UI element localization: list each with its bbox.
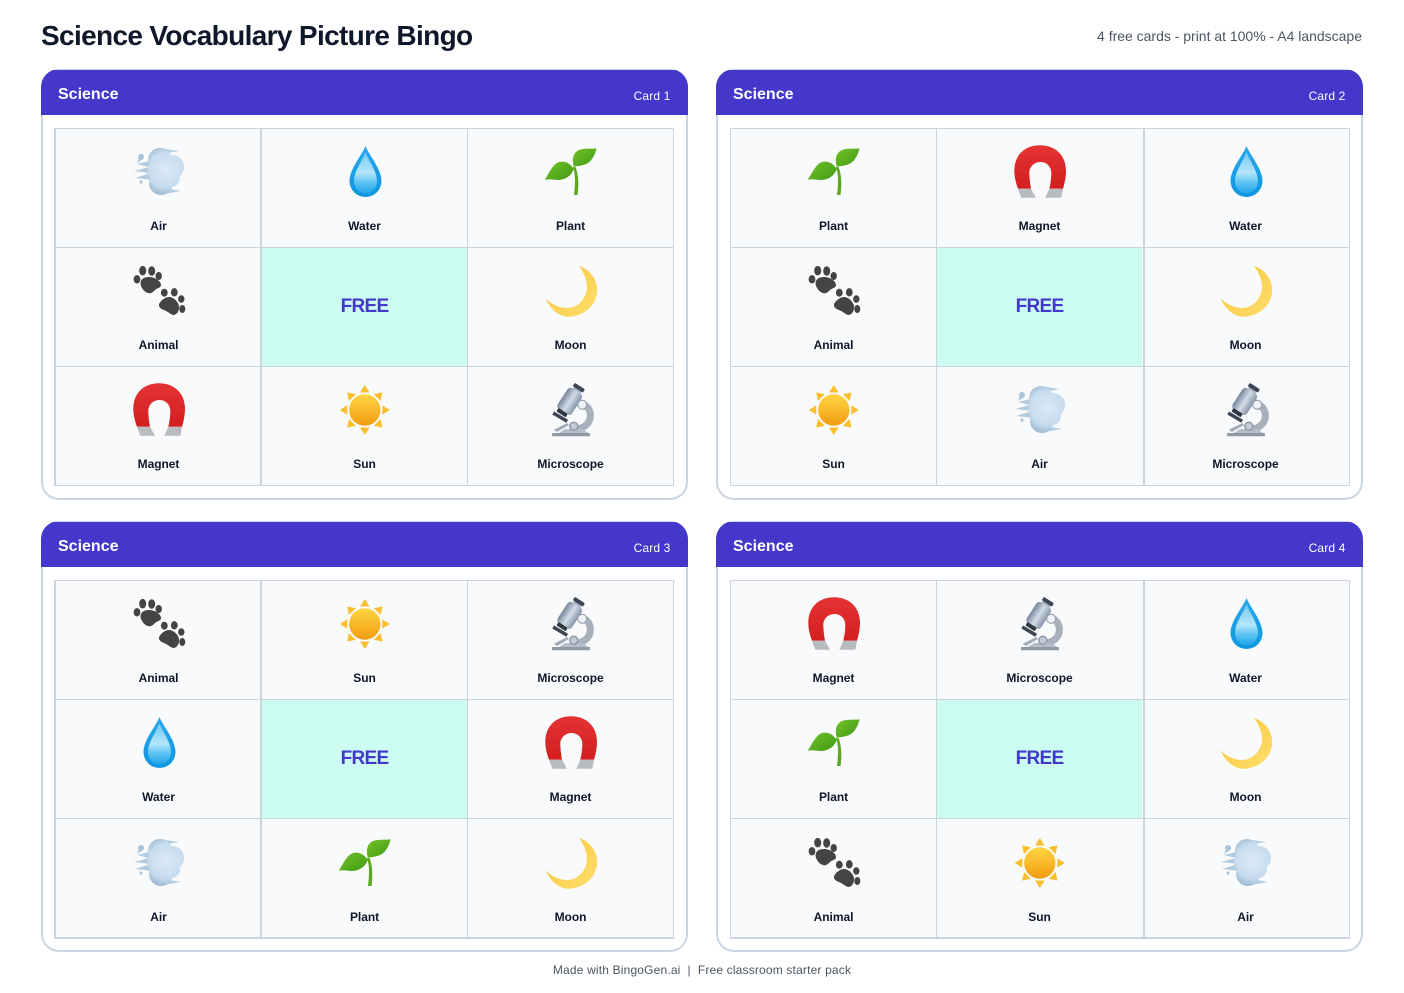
cell: FREE [261,247,468,366]
cell: Microscope: Microscope [537,671,604,685]
cell: Sun: Sun [822,457,845,471]
cell: Plant: Plant [819,219,848,233]
cell: Sun [261,580,468,699]
cell: Animal [730,247,937,366]
cell: Animal [55,247,262,366]
cell: Magnet: Magnet [1019,219,1060,233]
subtitle: 4 free cards - print at 100% - A4 landscape [1097,28,1362,44]
panel: card 2 [716,69,1363,500]
cell: Magnet [467,699,674,818]
card header [716,70,1363,115]
cell: Sun [936,818,1143,938]
panel: card 4 [716,521,1363,952]
cell: Microscope [467,580,674,699]
card header: Science [58,86,118,103]
cell: Plant [730,128,937,247]
cell: Plant [261,818,468,938]
cell: Air: Air [150,219,167,233]
cell: Water [55,699,262,818]
cell: Water: Water [1229,671,1262,685]
cell: Magnet: Magnet [550,790,591,804]
cell: FREE: FREE [1016,296,1063,317]
cell: Moon [1142,247,1349,366]
cell: Water [261,128,468,247]
cell: Animal: Animal [139,671,178,685]
cell: Moon: Moon [555,910,586,924]
cell: Moon [1142,699,1349,818]
cell: Air [936,366,1143,486]
cell: Moon: Moon [555,338,586,352]
cell: Plant: Plant [819,790,848,804]
cell: Animal [730,818,937,938]
cell: Magnet [730,580,937,699]
panel: card 1 [41,69,688,500]
cell: Microscope [467,366,674,486]
cell: Animal: Animal [814,338,853,352]
card header [716,522,1363,567]
cell: Air: Air [150,910,167,924]
footer: Made with BingoGen.ai | Free classroom starter pack [553,963,851,977]
cell: Microscope: Microscope [1212,457,1279,471]
cell: Plant: Plant [556,219,585,233]
cell: FREE: FREE [341,296,388,317]
cell: Microscope [1142,366,1349,486]
card header: Science [58,538,118,555]
cell: Microscope [936,580,1143,699]
panel: card 3 [41,521,688,952]
cell: Moon: Moon [1230,338,1261,352]
cell: Moon: Moon [1230,790,1261,804]
cell: FREE [936,247,1143,366]
cell: Plant [730,699,937,818]
title: Science Vocabulary Picture Bingo [41,20,472,51]
cell: Magnet [936,128,1143,247]
card header [41,70,688,115]
cell: Plant [467,128,674,247]
card header: Card 2 [1309,89,1346,103]
cell: Microscope: Microscope [537,457,604,471]
card header: Science [733,538,793,555]
card header [41,522,688,567]
cell: Air [55,128,262,247]
cell: Animal [55,580,262,699]
cell: Sun: Sun [353,671,376,685]
cell: Sun [730,366,937,486]
cell: FREE [936,699,1143,818]
card header: Card 1 [634,89,670,103]
cell: Moon [467,818,674,938]
cell: Magnet: Magnet [813,671,854,685]
card header: Card 4 [1309,541,1346,555]
cell: Air: Air [1237,910,1254,924]
cell: Microscope: Microscope [1006,671,1073,685]
cell: FREE: FREE [1016,748,1063,769]
cell: Moon [467,247,674,366]
cell: Water: Water [1229,219,1262,233]
cell: Air [55,818,262,938]
cell: Animal: Animal [139,338,178,352]
cell: Animal: Animal [814,910,853,924]
cell: Water [1142,128,1349,247]
cell: Magnet [55,366,262,486]
cell: Plant: Plant [350,910,379,924]
cell: Sun [261,366,468,486]
cell: Sun: Sun [353,457,376,471]
cell: FREE: FREE [341,748,388,769]
cell: Magnet: Magnet [138,457,179,471]
cell: FREE [261,699,468,818]
cell: Water [1142,580,1349,699]
cell: Air [1142,818,1349,938]
cell: Water: Water [142,790,175,804]
card header: Science [733,86,793,103]
cell: Sun: Sun [1028,910,1051,924]
card header: Card 3 [634,541,670,555]
cell: Air: Air [1031,457,1048,471]
cell: Water: Water [348,219,381,233]
